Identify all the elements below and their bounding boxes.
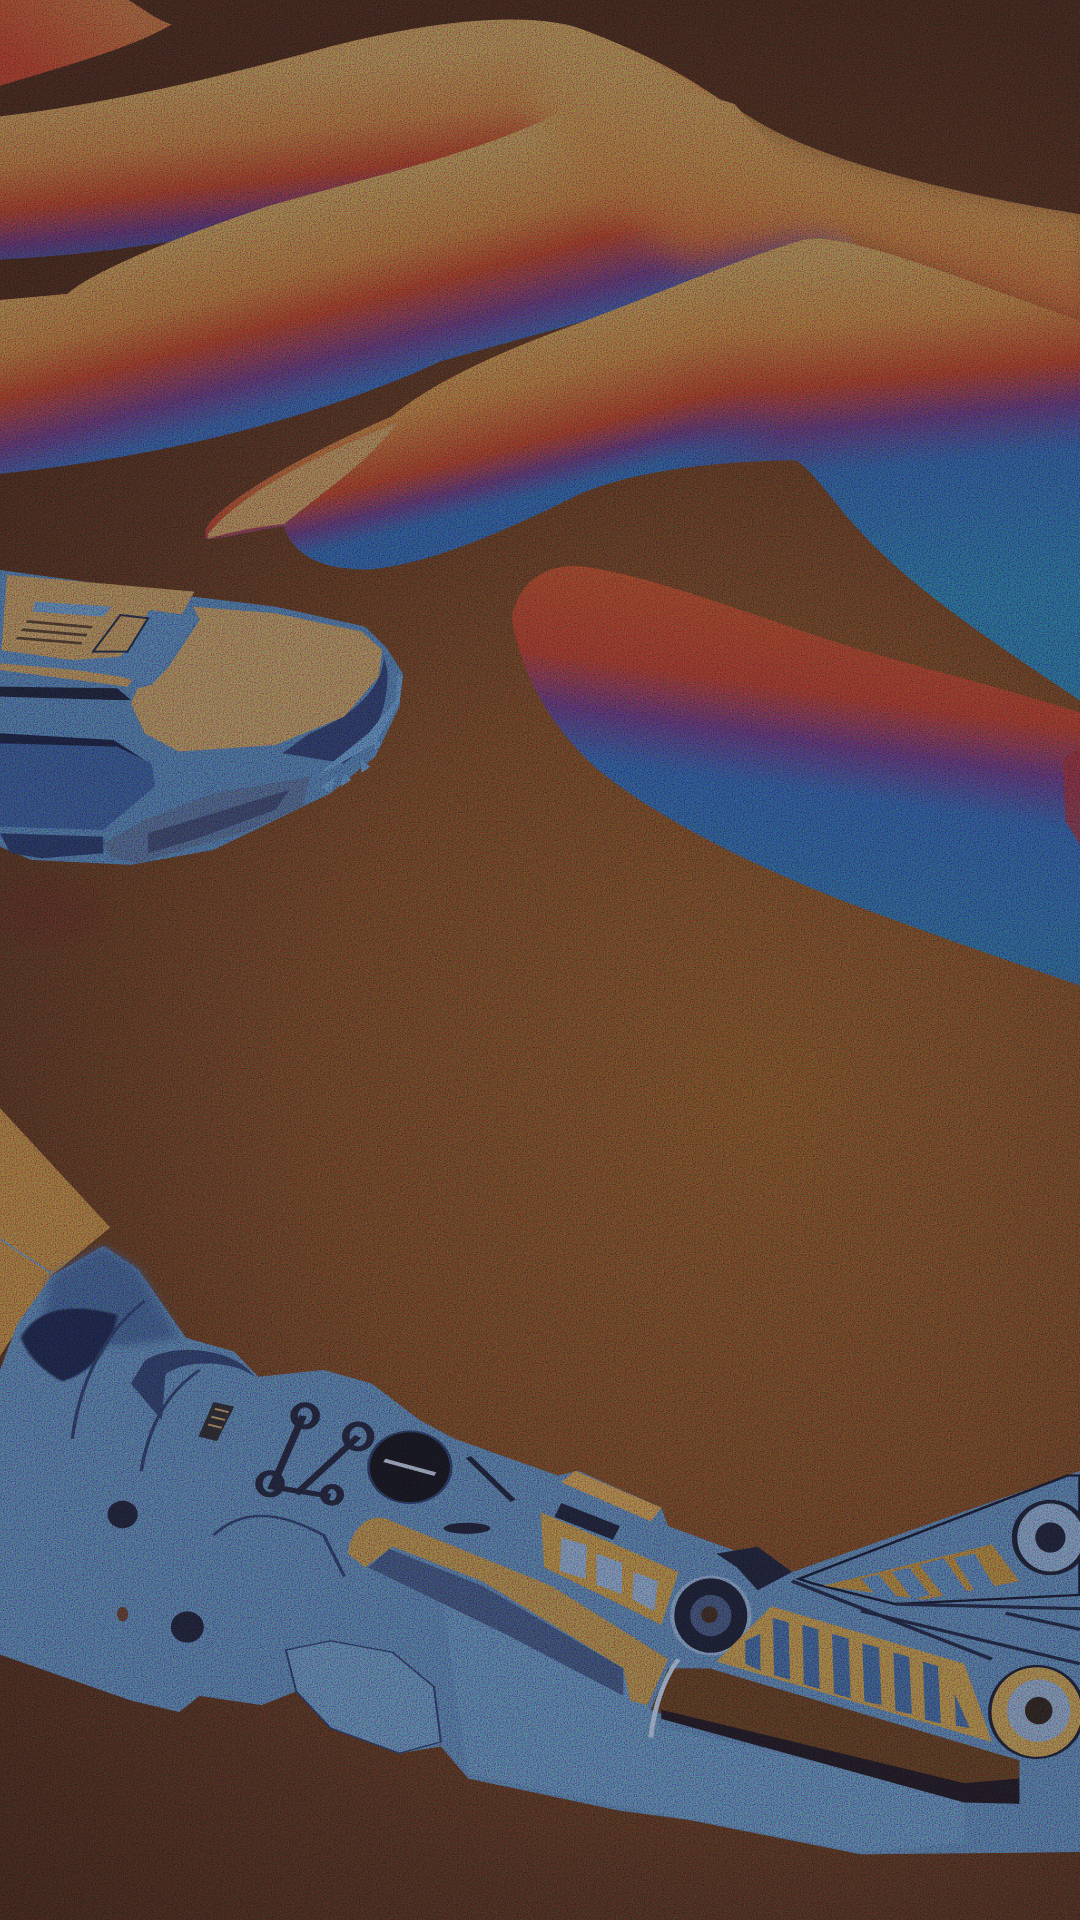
finger: upper pinky <box>0 19 735 260</box>
lower wheel joint <box>990 1666 1080 1758</box>
ribs <box>72 1301 200 1471</box>
upper finger blade <box>799 1476 1080 1604</box>
tan long strut <box>348 1518 668 1705</box>
tan cap <box>561 1471 661 1521</box>
dial slot <box>384 1460 435 1474</box>
arm seam <box>0 1239 52 1273</box>
upper vent slots <box>861 1554 995 1599</box>
hand: human fingers <box>0 0 1080 986</box>
collar ring <box>131 1350 255 1420</box>
dark strut <box>468 1457 513 1501</box>
blue bar <box>33 602 112 617</box>
dark joint cap <box>716 1547 792 1590</box>
back of hand <box>527 20 1080 321</box>
finger lower tan vent panel <box>716 1606 992 1742</box>
wheel joint <box>672 1577 749 1654</box>
dark side shadow <box>0 735 155 830</box>
panel windows <box>560 1538 658 1611</box>
upper finger vent panel <box>823 1544 1019 1599</box>
vent grille <box>10 615 96 647</box>
mouse shell <box>0 570 403 865</box>
dark spots <box>107 1501 490 1643</box>
index fingertip shading <box>206 266 763 570</box>
connector <box>198 1402 234 1441</box>
finger: top-left fragment <box>0 0 171 86</box>
small panel outline <box>93 615 148 652</box>
tan window panel <box>541 1512 678 1625</box>
finger: thumb <box>512 566 1080 986</box>
robotic mouse <box>0 570 403 865</box>
tan button pad <box>131 607 382 752</box>
dark top slot <box>554 1503 620 1540</box>
lower dark base <box>0 833 103 858</box>
toothed ridge <box>317 673 403 793</box>
linkage <box>259 1405 371 1503</box>
round black dial <box>368 1431 451 1503</box>
dark brown underside <box>651 1668 1019 1804</box>
desk shadow under the mouse <box>0 882 104 943</box>
scroll wedge <box>103 777 310 863</box>
dark groove <box>0 687 131 700</box>
finger: middle with fingertip at the left edge <box>0 91 857 474</box>
lower lighter shading <box>441 1590 964 1852</box>
dim top of the shoulder <box>41 1246 179 1347</box>
hose bulge <box>214 1516 344 1577</box>
shadow under the knuckle <box>1063 747 1080 845</box>
robotic arm <box>0 1108 1080 1854</box>
shoulder shadow <box>21 1308 117 1381</box>
upper wheel joint <box>1015 1502 1080 1573</box>
shell shadow rim <box>282 657 388 763</box>
dark mechanical lines <box>792 1581 1080 1664</box>
finger: index and back of hand <box>206 239 1080 700</box>
raised round boss <box>286 1641 441 1753</box>
blue clip <box>0 610 198 685</box>
arm silhouette <box>0 1246 1080 1854</box>
mouse top tan panel <box>0 575 195 687</box>
fingernail highlight <box>208 422 398 539</box>
dark recess <box>368 1549 623 1696</box>
cable <box>651 1659 678 1737</box>
underside shadow <box>661 1710 1019 1804</box>
vent slots <box>745 1618 970 1728</box>
tan forearm cover <box>0 1108 110 1356</box>
